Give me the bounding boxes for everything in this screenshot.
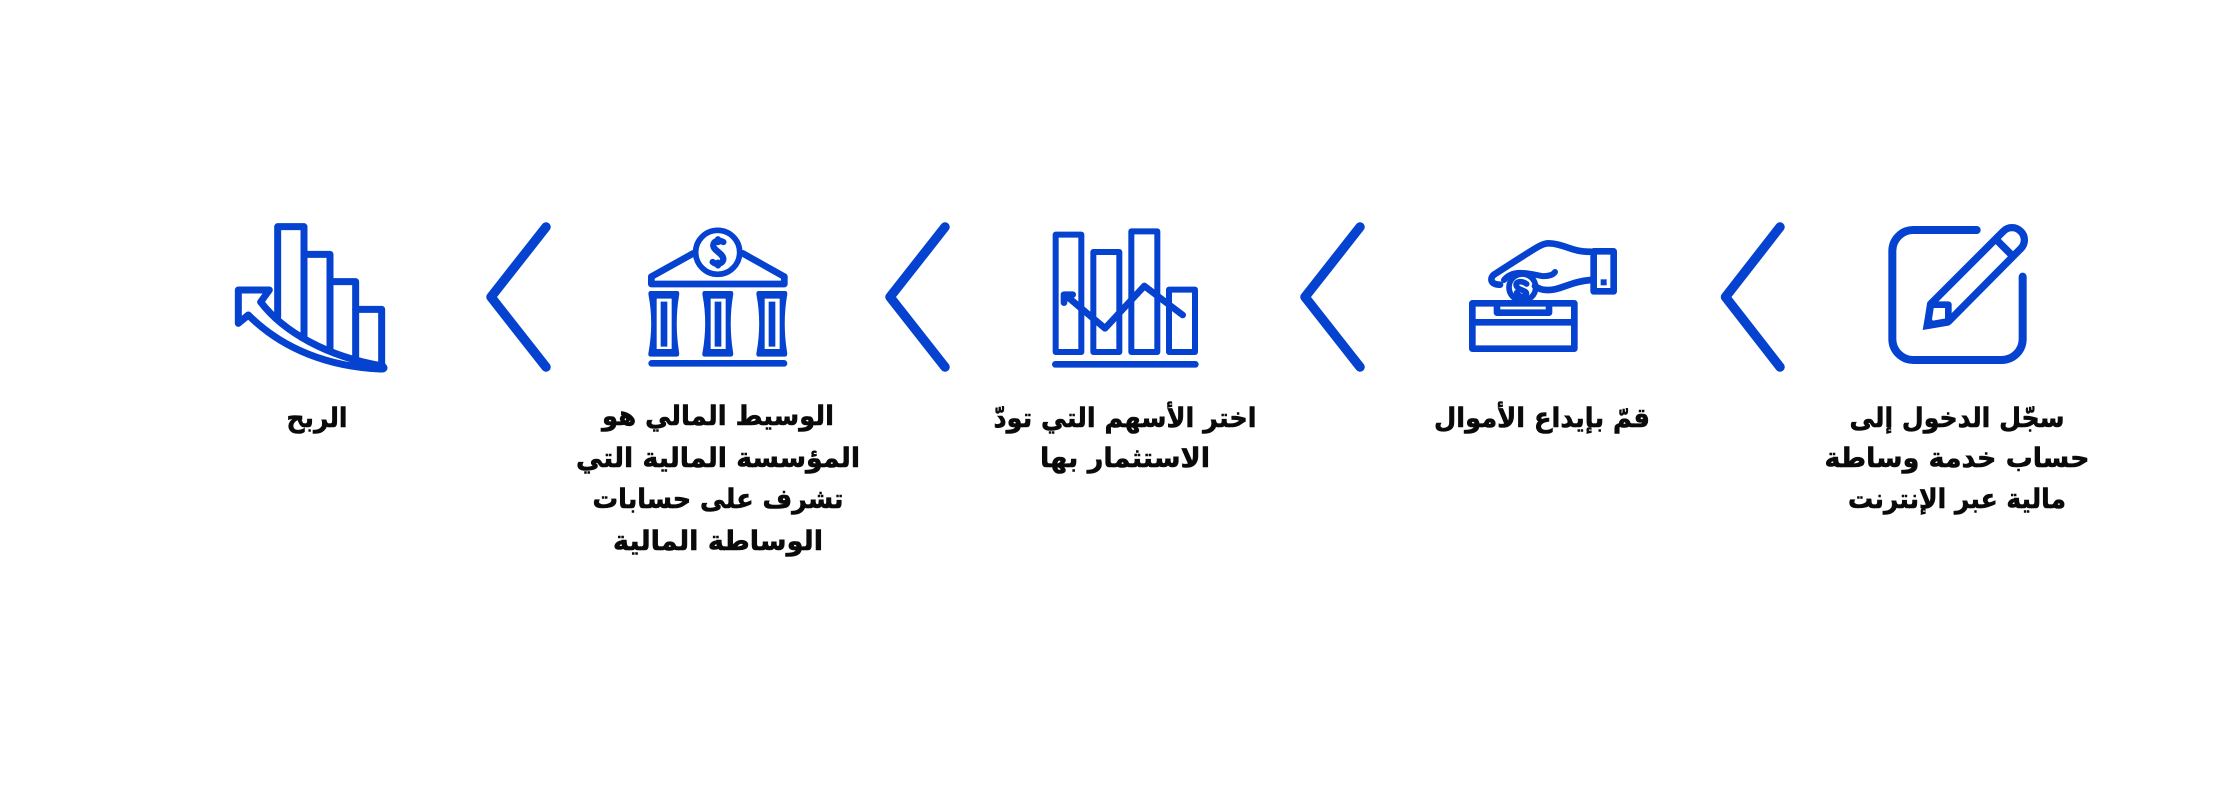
arrow: chevron from step 4 to step 5 [491,227,546,367]
text: step 3 label: الاستثمار بها [1040,443,1210,474]
text: step 3 label: اختر الأسهم التي تودّ [994,401,1256,434]
step 1: log in to brokerage account [1824,228,2090,515]
step 4: broker institution [576,230,860,557]
text: step 1 label: مالية عبر الإنترنت [1848,484,2066,515]
text: step 5 label: الربح [286,403,348,434]
text: step 4 label [576,401,860,557]
icon: rising bars with curved arrow [238,227,384,369]
icon: bank building with dollar coin [648,230,787,363]
icon: bar chart with arrow [1055,231,1195,364]
text: step 3 label [994,401,1256,474]
icon: pencil on square [1892,228,2024,360]
step 5: profit [238,227,384,434]
text: step 1 label: سجّل الدخول إلى [1850,403,2064,434]
text: step 4 label: الوسيط المالي هو [600,401,834,432]
text: step 1 label [1824,403,2090,515]
text: step 4 label: تشرف على حسابات [592,484,844,515]
arrow: chevron from step 1 to step 2 [1726,227,1780,367]
text: step 2 label: قمّ بإيداع الأموال [1434,401,1650,434]
arrow: chevron from step 3 to step 4 [890,227,945,367]
text: step 1 label: حساب خدمة وساطة [1824,443,2090,474]
step 2: deposit funds [1434,243,1650,434]
text: step 4 label: الوساطة المالية [613,526,823,557]
icon: hand dropping coin into box [1472,243,1614,349]
text: step 4 label: المؤسسة المالية التي [576,443,860,474]
arrow: chevron from step 2 to step 3 [1305,227,1360,367]
step 3: choose stocks [994,231,1256,474]
